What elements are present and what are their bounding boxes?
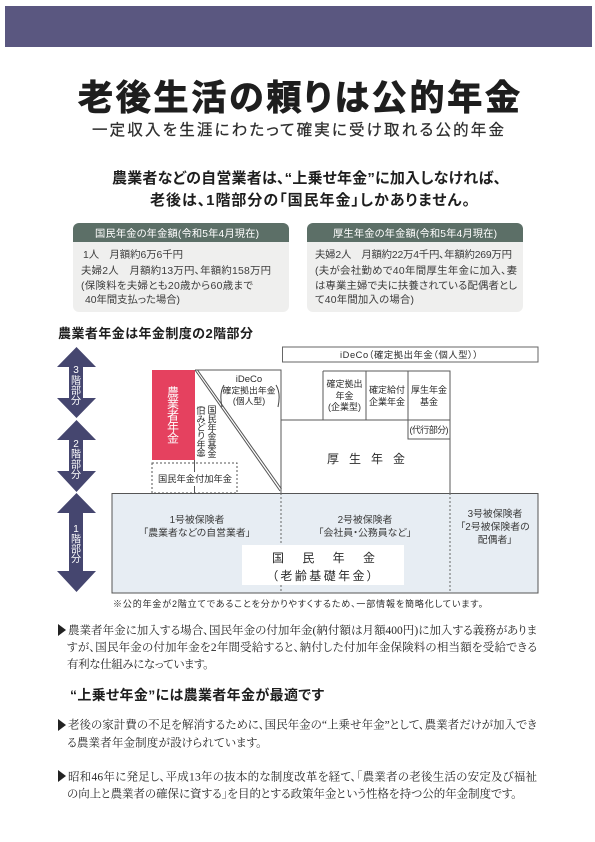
category 3: 「2号被保険者の bbox=[460, 520, 530, 533]
additional national pension bbox=[152, 463, 237, 493]
national pension fund column: 国民年金基金 bbox=[207, 405, 217, 459]
lead text: 農業者などの自営業者は、“上乗せ年金”に加入しなければ、 bbox=[112, 169, 501, 187]
paragraph: history: の向上と農業者の確保に資する」を目的とする政策年金という性格を持つ公的年金制度です。 bbox=[67, 786, 517, 800]
category 1 bbox=[143, 513, 251, 539]
panel: national pension amount: 40年間支払った場合) bbox=[85, 293, 180, 306]
paragraph: purpose bbox=[58, 718, 537, 750]
defined benefit corporate: 確定給付 bbox=[369, 384, 405, 395]
employees pension: 厚生年金 bbox=[327, 452, 405, 466]
title: 老後生活の頼りは公的年金 bbox=[78, 79, 520, 118]
bullet bbox=[58, 770, 66, 782]
section heading: 農業者年金は年金制度の2階部分 bbox=[58, 326, 253, 341]
category 3: 配偶者」 bbox=[478, 533, 512, 546]
category 1: 「農業者などの自営業者」 bbox=[143, 526, 251, 539]
paragraph: purpose: る農業者年金制度が設けられています。 bbox=[67, 736, 262, 750]
subtitle: 一定収入を生涯にわたって確実に受け取れる公的年金 bbox=[92, 121, 504, 139]
panel: national pension amount: (保険料を夫婦とも20歳から60歳まで bbox=[81, 279, 253, 292]
iDeCo individual label: (個人型) bbox=[233, 395, 265, 406]
arrow: level 2 bbox=[57, 420, 96, 492]
panel: employees pension amount bbox=[307, 223, 523, 312]
panel: national pension amount: 夫婦2人 月額約13万円、年額約158万円 bbox=[81, 264, 271, 277]
category 1: 1号被保険者 bbox=[170, 513, 225, 526]
panel: national pension amount bbox=[73, 223, 289, 312]
national pension base block bbox=[112, 493, 538, 593]
national pension fund column: ︵旧みどり年金︶ bbox=[196, 400, 206, 464]
lead text: 老後は、1階部分の「国民年金」しかありません。 bbox=[150, 191, 470, 209]
category 3: 3号被保険者 bbox=[468, 507, 523, 520]
paragraph: history bbox=[58, 770, 538, 800]
defined contribution corporate: 確定拠出 bbox=[326, 378, 363, 389]
paragraph: additional pension bbox=[58, 623, 537, 671]
category 2 bbox=[319, 513, 411, 539]
national pension label: 国民年金 bbox=[272, 551, 375, 565]
national pension fund column bbox=[194, 370, 282, 493]
iDeCo individual label: 確定拠出年金 bbox=[222, 384, 276, 396]
footnote: ※公的年金が2階立てであることを分かりやすくするため、一部情報を簡略化しています。 bbox=[113, 598, 483, 609]
corporate pension boxes bbox=[281, 371, 450, 493]
substitute portion: (代行部分) bbox=[410, 424, 448, 435]
header band bbox=[5, 6, 592, 47]
paragraph: additional pension: 農業者年金に加入する場合、国民年金の付加年金(納付額は月額400円)に加入する義務がありま bbox=[68, 623, 537, 637]
arrows: pension levels bbox=[57, 347, 96, 592]
employees pension fund: 基金 bbox=[420, 396, 438, 407]
arrow: level 1: 1階部分 bbox=[71, 524, 81, 565]
defined contribution corporate: 年金 bbox=[335, 390, 354, 401]
category 2: 「会社員・公務員など」 bbox=[319, 526, 411, 539]
iDeCo individual label bbox=[221, 374, 279, 407]
national pension label: （老齢基礎年金） bbox=[272, 569, 373, 583]
bullet bbox=[58, 719, 66, 731]
panel: employees pension amount: 夫婦2人 月額約22万4千円、年額約269万円 bbox=[315, 248, 512, 261]
national pension label bbox=[242, 545, 404, 585]
panel: employees pension amount: は専業主婦で夫に扶養されている配偶者とし bbox=[315, 279, 517, 292]
paragraph: additional pension: 有利な仕組みになっています。 bbox=[67, 657, 209, 671]
subheading: “上乗せ年金”には農業者年金が最適です bbox=[70, 687, 325, 703]
paragraph: additional pension: すが、国民年金の付加年金を2年間受給すると、納付した付加年金保険料の相当額を受給できる bbox=[67, 640, 537, 654]
farmers pension block: 農業者年金 bbox=[167, 385, 179, 446]
panel: national pension amount: 国民年金の年金額(令和5年4月現在) bbox=[95, 227, 259, 240]
category 2: 2号被保険者 bbox=[338, 513, 393, 526]
category 3 bbox=[460, 507, 530, 546]
farmers pension block bbox=[152, 370, 195, 460]
arrow: level 1 bbox=[57, 493, 96, 592]
iDeCo individual label: iDeCo bbox=[236, 374, 262, 385]
arrow: level 3: 3階部分 bbox=[71, 365, 81, 407]
arrow: level 2: 2階部分 bbox=[71, 439, 81, 481]
defined contribution corporate: (企業型) bbox=[328, 401, 361, 412]
defined benefit corporate bbox=[369, 384, 405, 407]
iDeCo top bar bbox=[282, 347, 538, 362]
panel: employees pension amount: て40年間加入の場合) bbox=[315, 293, 414, 306]
employees pension fund bbox=[411, 384, 447, 407]
lead text bbox=[112, 169, 501, 209]
paragraph: history: 昭和46年に発足し、平成13年の抜本的な制度改革を経て、「農業者の老後生活の安定及び福祉 bbox=[68, 770, 538, 784]
paragraph: purpose: 老後の家計費の不足を解消するために、国民年金の“上乗せ年金”として、農業者だけが加入でき bbox=[68, 718, 537, 732]
panel: employees pension amount: 厚生年金の年金額(令和5年4月現在) bbox=[333, 227, 497, 240]
defined contribution corporate bbox=[326, 378, 363, 412]
iDeCo top bar: iDeCo（確定拠出年金（個人型）） bbox=[340, 349, 478, 360]
employees pension fund: 厚生年金 bbox=[411, 384, 447, 395]
additional national pension: 国民年金付加年金 bbox=[158, 473, 232, 484]
panel: employees pension amount: (夫が会社勤めで40年間厚生年金に加入、妻 bbox=[315, 264, 517, 277]
defined benefit corporate: 企業年金 bbox=[369, 396, 405, 407]
panel: national pension amount: 1人 月額約6万6千円 bbox=[83, 248, 183, 261]
bullet bbox=[58, 624, 66, 636]
arrow: level 3 bbox=[57, 347, 96, 418]
